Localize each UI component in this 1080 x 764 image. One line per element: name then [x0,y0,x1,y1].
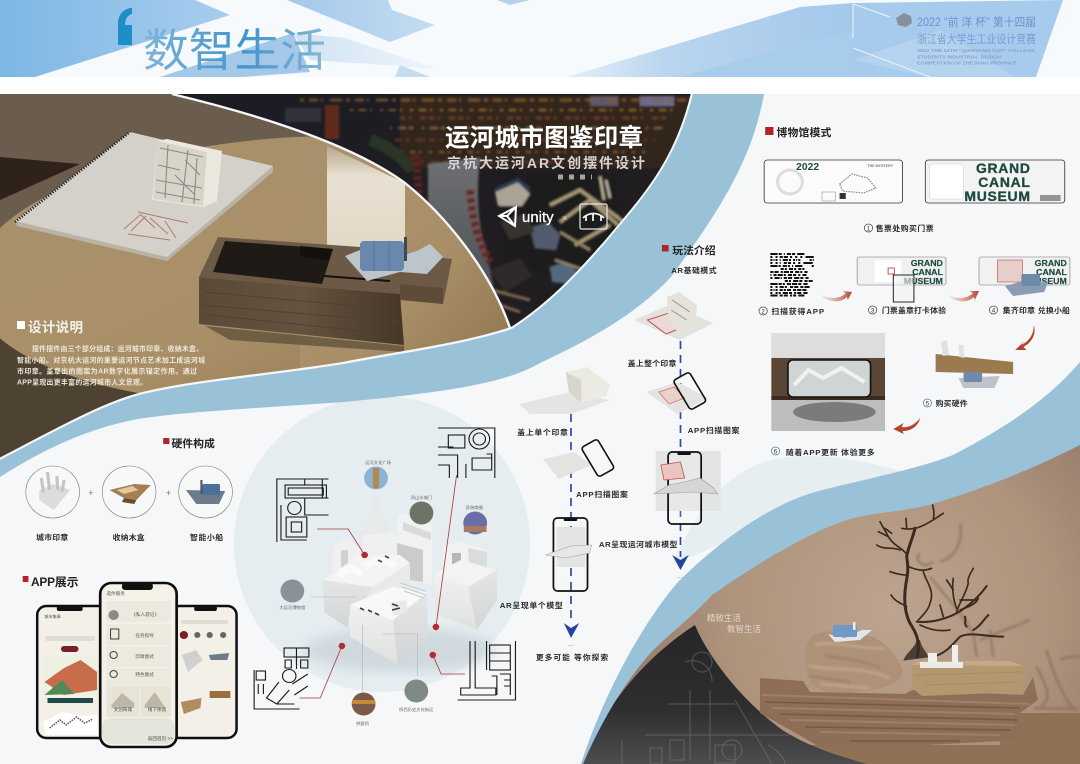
tiny place names: 大运河博物馆 [279,604,305,611]
design description: 智能小船。对京杭大运河的重要运河节点艺术加工成运河城 [17,356,205,364]
design description: APP呈现出更丰富的运河城市人文景观。 [17,378,147,386]
logos unity x bridge: unity [522,209,554,226]
small ticket stamping: CANAL [912,267,943,277]
label: 盖上整个印章 [628,358,677,368]
shelf slab [760,677,1038,747]
competition logo and text: 2022 "前 洋 杯" 第十四届 [917,15,1036,29]
wooden box [199,237,452,352]
dashed line [570,400,572,620]
smart boat [345,237,443,281]
pale wave shape [672,456,905,565]
driftwood tree [877,505,1003,661]
step 5 label: 5 [926,401,930,407]
hardware components: 智能小船 [190,532,223,542]
step 6 label: 6 [774,449,778,455]
stone [805,631,903,693]
wooden box with city stamp [912,645,1023,696]
right cube [435,560,497,587]
round table top [0,136,320,393]
QR code [770,254,814,296]
paper and cube [519,367,610,414]
white edge of lens [172,94,510,328]
map pin label thumbnails [280,466,487,716]
step 3 label: 门票盖章打卡体验 [882,305,946,315]
flow column 1: single stamp [500,367,628,662]
arrow 2 [948,291,979,301]
hero: night city photo [177,94,691,327]
step 4 label: 4 [992,308,996,314]
plus: + [166,488,171,498]
ticket back: MUSEUM [964,189,1031,204]
center phone: 文创商城 [114,706,133,713]
center phone [100,583,177,747]
dashed line [679,341,681,557]
tiny place names: 武林商圈 [466,504,483,511]
line icon bottom right [458,641,515,700]
header banner [0,0,1080,77]
center phone: 线下体验 [148,706,167,713]
arrow head [564,623,579,638]
small ticket stamping: GRAND [911,258,943,268]
tree shadow [918,523,1080,710]
tiny place names: 运河文化广场 [365,459,391,466]
heading: app showcase: APP展示 [31,576,79,589]
right phone [170,606,237,738]
plus: + [88,488,94,498]
hardware components [26,466,232,542]
ticket back [925,160,1065,204]
ticket front: 2022 [796,162,819,173]
arrow 1 [821,291,852,301]
competition logo and text [896,13,1036,66]
red leader lines [300,475,465,698]
step 6 label: 随着APP更新 体验更多 [786,447,875,457]
small ticket with boat [979,257,1070,296]
logos unity x bridge [499,204,607,229]
tiny place names [279,459,483,727]
label: APP扫描图案 [576,489,628,499]
line icon bottom left [254,648,309,709]
left phone [37,606,109,738]
paper and cube [634,292,714,340]
main section title: 数智生活 [143,14,326,79]
tagline on wall: 数智生活 [727,624,761,634]
logos unity x bridge: × [562,213,567,223]
arrow head [672,555,689,570]
ellipsis: .... [677,573,684,580]
ticket back: GRAND [976,161,1031,176]
small lights row [558,174,592,180]
step 5 label [923,398,968,408]
tiny place names: 凤山水城门 [411,494,432,501]
hero title: 运河城市图鉴印章 [445,123,643,152]
design description: 市印章。盖章出的图案为AR数字化展示锚定作用。通过 [17,366,197,376]
step 3 label: 3 [871,308,875,314]
flow column 2: full stamp [599,292,740,580]
competition logo and text: STUDENTS INDUSTRIAL DESIGN [917,54,1002,60]
gameplay and museum sections [500,126,1070,662]
line icon top right [438,428,495,478]
circle: city stamp [26,466,80,518]
ticket front: THE MYSTERY [867,164,894,168]
ellipsis: .... [568,641,575,648]
white pillar [327,146,405,247]
ticket back: CANAL [978,175,1031,190]
arrow 4 [893,418,920,434]
competition logo and text: 浙江省大学生工业设计竞赛 [917,32,1036,46]
blue ribbon lower [581,362,1080,764]
model boat on stone [828,622,872,642]
circle: wooden box [102,466,156,518]
paper and tilted phone [646,372,708,414]
competition logo and text: COMPETITION OF ZHEJIANG PROVINCE [917,60,1017,66]
small ticket with boat: MUSEUM [1028,276,1067,286]
lower right photo [580,430,1080,764]
red stamp print [124,212,188,240]
arrow 3 [1015,325,1035,350]
right tower block [443,541,487,588]
small ticket with boat: CANAL [1036,267,1067,277]
step 1 label: 1 [867,226,871,232]
step 2 label: 2 [761,309,765,315]
left cube [323,555,410,607]
soft shadow [305,628,495,672]
stamp cube [152,139,222,207]
circle: smart boat [179,466,232,518]
tiny place names: 桥西历史文化街区 [399,706,434,713]
tagline on wall: 精致生活 [707,613,741,623]
labels: 城市印章 [36,532,68,542]
notebook [15,132,273,261]
design description: 摆件摆件由三个部分组成：运河城市印章、收纳木盒、 [32,344,203,353]
left lower column (hardware and app) [23,437,237,747]
phone with model [654,451,721,524]
heading: museum mode: 博物馆模式 [777,126,832,139]
hero: table photo with stamp and box [0,94,509,458]
left phone: 城市集章 [44,613,61,619]
tiny place names: 拱宸桥 [356,720,370,727]
design description: 设计说明 [28,320,83,335]
small ticket stamping: MUSEUM [904,276,943,286]
quote mark [118,8,132,45]
step 4 label: 集齐印章 兑换小船 [1003,305,1070,315]
step 5 label: 购买硬件 [936,398,968,408]
center phone: 印章图式 [135,653,154,660]
blue ribbon upper [0,94,764,477]
label: AR basic mode: AR基础模式 [671,265,717,275]
center phone: 选件服务 [106,590,125,597]
app phone screens [37,583,237,747]
central city stamp model [254,428,515,727]
front cube [350,587,427,620]
label: AR呈现运河城市模型 [599,539,678,549]
center phone: 任务指导 [135,632,154,639]
label: APP扫描图案 [688,425,740,435]
line icon top left [277,479,328,542]
label: 盖上单个印章 [517,427,568,437]
center phone: 特色图式 [135,671,154,678]
scaled overlay: thumbnails, labels, leader lines, icons [254,428,515,727]
center phone: 《私人游记》 [131,611,159,618]
label: AR呈现单个模型 [500,600,563,610]
white blocks [323,492,497,665]
pale circle behind model [234,396,530,692]
wooden box and boat photo [936,340,1013,388]
hero subtitle: 京杭大运河AR文创摆件设计 [447,155,645,171]
small ticket with boat: GRAND [1035,258,1067,268]
step 2 label: 扫描获得APP [771,306,824,316]
hardware components: 收纳木盒 [113,532,145,542]
dark line-art corner [580,625,867,764]
paper and tilted phone [543,439,615,479]
center phone: 返回首页 >> [148,735,173,742]
phone with model [545,518,592,591]
competition logo and text: 2022 THE 14TH "QIANYANG CUP" COLLEGE [917,48,1035,53]
heading: hardware: 硬件构成 [171,437,215,450]
heading: gameplay: 玩法介绍 [672,244,716,257]
AR scene photo [771,333,885,431]
design description [17,320,205,386]
label: 更多可能 等你探索 [536,652,608,662]
small ticket stamping [857,257,946,302]
step 1 label: 售票处购买门票 [876,223,934,233]
ticket front [764,160,903,203]
tagline on wall [707,613,761,634]
